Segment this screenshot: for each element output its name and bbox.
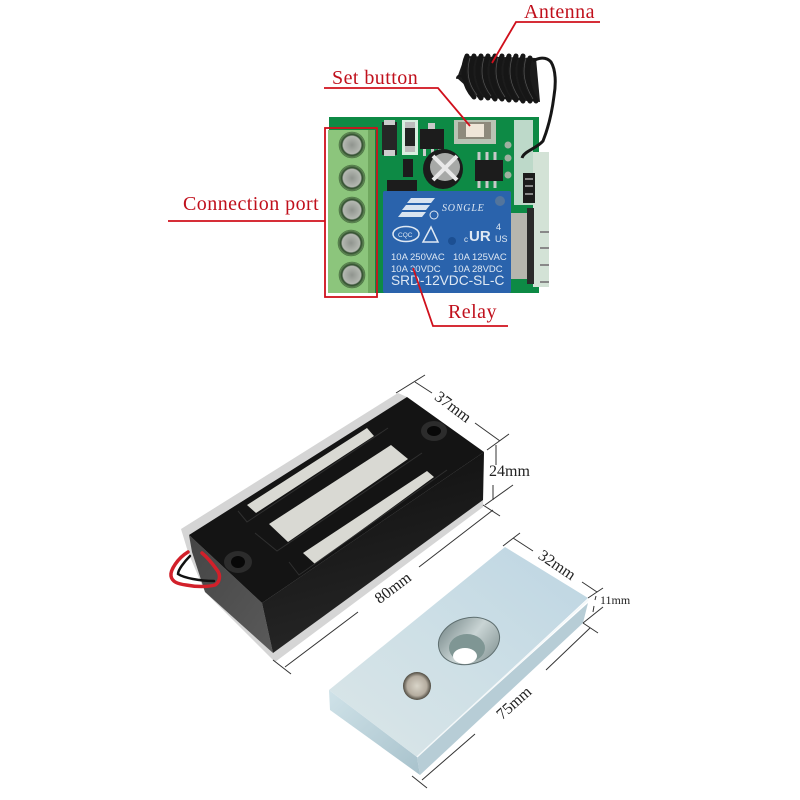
component: resistor <box>402 120 418 155</box>
relay text: SONGLE <box>442 203 485 214</box>
relay text: 10A 125VAC <box>453 252 507 263</box>
relay text: 4 <box>496 222 501 232</box>
relay body <box>383 191 511 293</box>
label: Connection port <box>168 128 377 297</box>
aluminium base <box>181 393 484 662</box>
end face <box>189 535 273 653</box>
relay text <box>391 203 508 288</box>
mounting screws <box>224 421 447 573</box>
plate top <box>329 547 588 757</box>
component: capacitor <box>423 149 463 189</box>
label: Set button <box>324 67 470 126</box>
component: transistor <box>387 159 417 192</box>
label: Relay <box>413 268 508 326</box>
wire loop <box>171 552 219 586</box>
component: diode <box>382 120 397 156</box>
board pads <box>504 142 512 178</box>
dimension: 37mm <box>396 375 509 450</box>
plate highlight edge <box>417 600 588 757</box>
relay text: 10A 28VDC <box>453 264 503 275</box>
dimension: 24mm: 24mm <box>489 463 530 480</box>
label: Relay: Relay <box>448 301 497 323</box>
receiver module <box>511 120 549 287</box>
panel: armature plate <box>329 547 588 775</box>
relay text: c <box>464 235 468 244</box>
label: Set button: Set button <box>332 67 418 89</box>
dimension: 11mm <box>583 593 631 623</box>
component: set button <box>454 120 496 144</box>
label: Antenna: Antenna <box>524 1 595 23</box>
centre pin <box>403 672 431 700</box>
terminal screws <box>338 132 365 288</box>
component: regulator <box>420 123 444 156</box>
antenna <box>457 56 555 158</box>
side face <box>262 452 484 653</box>
relay text: 10A 30VDC <box>391 264 441 275</box>
dimension: 75mm: 75mm <box>493 683 536 723</box>
relay text: US <box>495 234 508 244</box>
label: Connection port: Connection port <box>183 193 319 215</box>
countersunk hole <box>433 611 505 671</box>
dimension: 24mm <box>485 445 530 505</box>
relay text: CQC <box>398 232 413 239</box>
strip recesses <box>238 428 447 575</box>
relay text: SRD-12VDC-SL-C <box>391 273 504 288</box>
dimension: 11mm: 11mm <box>600 593 631 607</box>
magnet strips <box>247 428 434 564</box>
terminal block <box>328 130 375 293</box>
dimension: 37mm: 37mm <box>431 388 475 427</box>
dimension: 75mm <box>412 623 598 788</box>
component: chip <box>475 152 503 188</box>
dimension: 32mm: 32mm <box>535 547 579 584</box>
dimension: 80mm: 80mm <box>372 569 415 607</box>
plate long side <box>417 603 588 775</box>
relay text: 10A 250VAC <box>391 252 445 263</box>
dimension: 32mm <box>503 533 603 598</box>
top face <box>189 397 484 603</box>
dimension: 80mm <box>273 505 500 674</box>
relay text: UR <box>469 228 491 245</box>
circuit board <box>329 117 539 293</box>
panel: magnetic lock <box>171 393 484 662</box>
label: Antenna <box>492 1 600 63</box>
plate end face <box>329 690 420 775</box>
panel: relay receiver board <box>328 56 555 293</box>
